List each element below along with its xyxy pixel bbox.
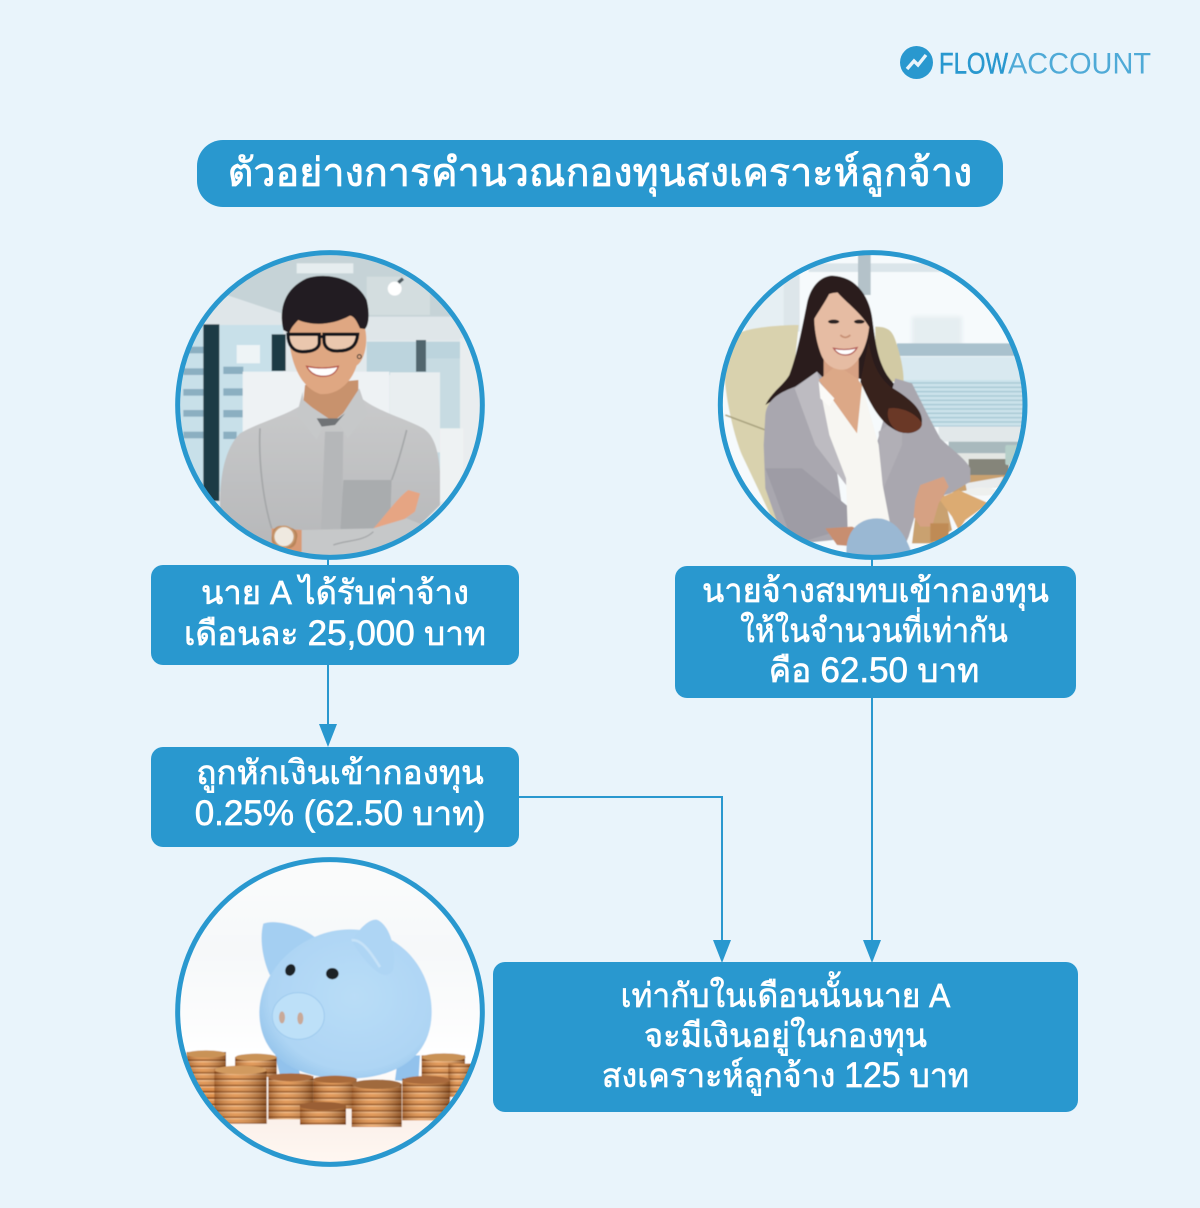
face bbox=[814, 292, 869, 370]
collar bbox=[298, 392, 311, 406]
box: employer contribution: นายจ้างสมทบเข้ากองทุน bbox=[702, 573, 1049, 610]
hair back bbox=[765, 275, 894, 406]
logo: FlowAccount bbox=[900, 46, 1151, 80]
box: employer contribution: คือ 62.50 บาท bbox=[769, 651, 979, 690]
box: deduction: ถูกหักเงินเข้ากองทุน bbox=[196, 755, 484, 792]
box: employee salary: เดือนละ 25,000 บาท bbox=[184, 614, 486, 652]
arm bbox=[373, 490, 420, 532]
jacket bbox=[764, 372, 970, 557]
arrow: employer box to result box bbox=[863, 558, 881, 963]
neck bbox=[822, 358, 860, 381]
arrow: man box to deduction box bbox=[319, 558, 337, 747]
arrow: deduction box to result box bbox=[519, 797, 731, 963]
box: deduction bbox=[151, 747, 519, 847]
box: result: เท่ากับในเดือนนั้นนาย A bbox=[621, 978, 950, 1015]
box: employee salary bbox=[151, 565, 519, 665]
ring bbox=[720, 253, 1025, 557]
title: ตัวอย่างการคำนวณกองทุนสงเคราะห์ลูกจ้าง bbox=[228, 151, 972, 195]
box: result bbox=[493, 962, 1078, 1112]
box: result: จะมีเงินอยู่ในกองทุน bbox=[644, 1018, 927, 1054]
box: employer contribution bbox=[675, 566, 1076, 698]
neck bbox=[303, 380, 358, 422]
photo: blue piggy bank with coins bbox=[177, 859, 483, 1165]
shirt bbox=[822, 390, 890, 528]
title bbox=[197, 140, 1003, 207]
box: employee salary: นาย A ได้รับค่าจ้าง bbox=[201, 575, 469, 612]
ring bbox=[178, 253, 482, 557]
photo: woman in blazer bbox=[719, 252, 1029, 558]
desk bbox=[912, 475, 1007, 543]
pig bbox=[262, 922, 317, 975]
chair bbox=[724, 325, 799, 525]
hand and jeans bbox=[914, 477, 949, 527]
logo icon bbox=[900, 46, 933, 79]
background art: photos, arrows and logo bbox=[175, 46, 1150, 1167]
hair front bbox=[860, 342, 922, 433]
man torso bbox=[220, 398, 440, 562]
coins bbox=[186, 1050, 472, 1127]
ring bbox=[178, 860, 482, 1164]
logo wordmark: ACCOUNT bbox=[1008, 48, 1151, 80]
box: result: สงเคราะห์ลูกจ้าง 125 บาท bbox=[602, 1056, 969, 1095]
photo: man with glasses bbox=[177, 252, 483, 562]
box: deduction: 0.25% (62.50 บาท) bbox=[195, 794, 485, 832]
logo wordmark: FLOW bbox=[939, 48, 1008, 80]
logo wordmark bbox=[939, 48, 1151, 80]
box: employer contribution: ให้ในจำนวนที่เท่ากัน bbox=[740, 612, 1008, 650]
head bbox=[289, 315, 367, 394]
